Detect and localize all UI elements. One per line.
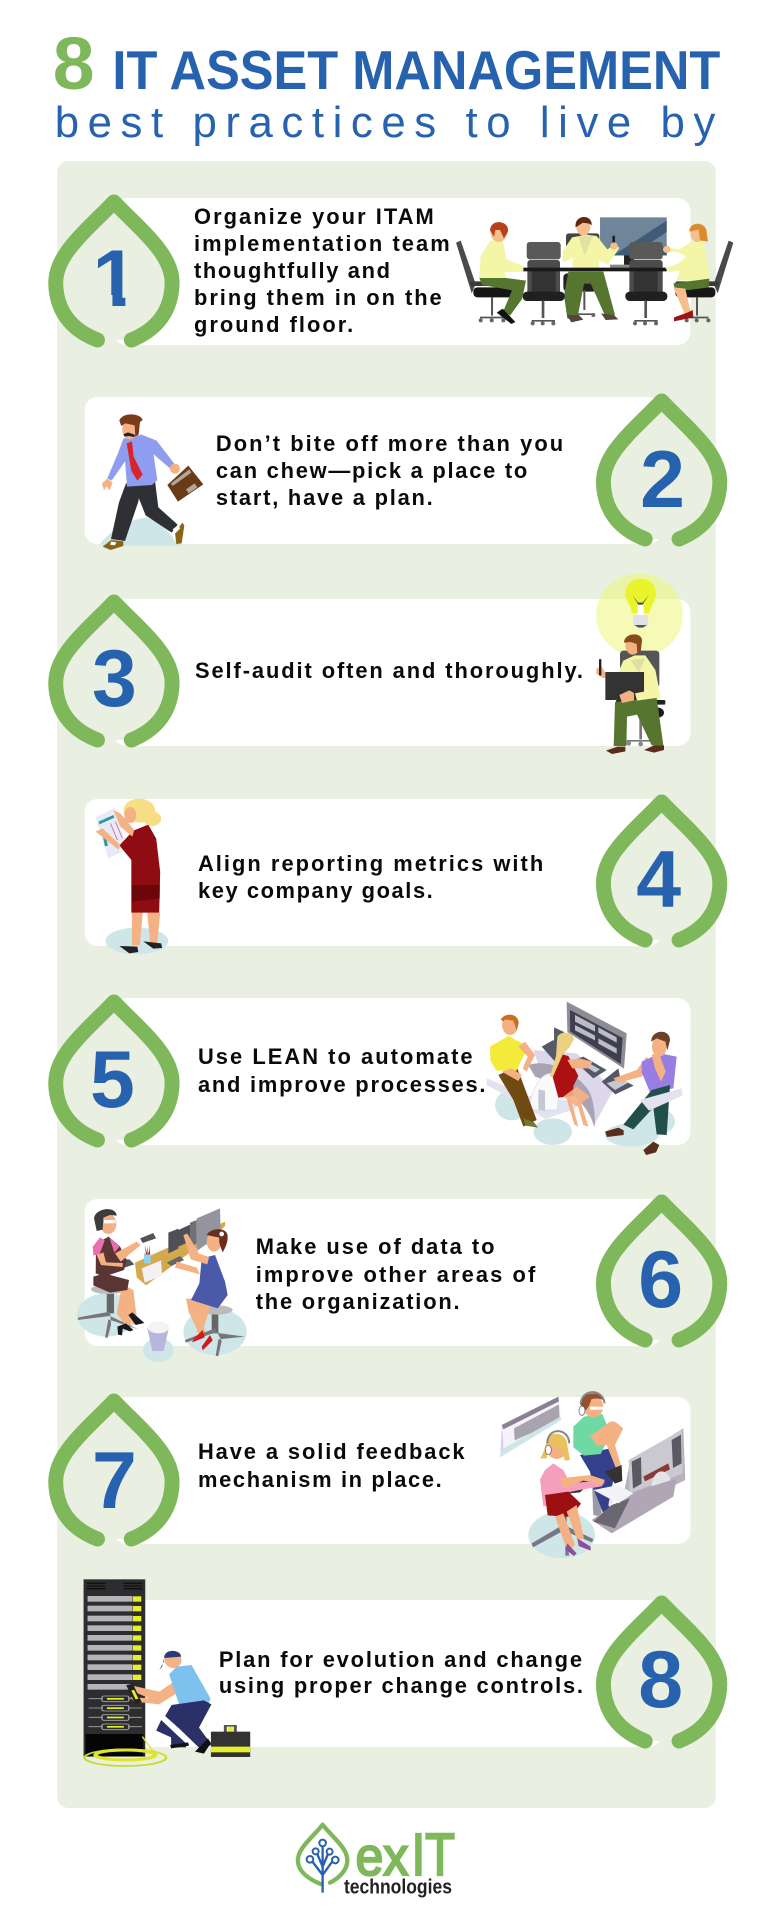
number 1: 1 (92, 234, 137, 324)
text 6: improve other areas of (256, 1262, 536, 1287)
text 8: Plan for evolution and change (219, 1647, 582, 1672)
number 3: 3 (92, 634, 137, 724)
illustration: man walking with briefcase (100, 414, 203, 550)
illustration: support agents with headsets (500, 1392, 685, 1558)
illustration: technician at server rack (84, 1579, 250, 1766)
number 8: 8 (638, 1635, 683, 1725)
card 3 (113, 599, 690, 746)
row 2 (85, 397, 720, 550)
text 4: key company goals. (198, 878, 433, 903)
leaf 3 (56, 602, 172, 740)
leaf 8 (603, 1603, 720, 1741)
text 7: mechanism in place. (198, 1467, 442, 1492)
card 5 (113, 998, 690, 1145)
text 6: Make use of data to (256, 1234, 494, 1259)
illustration: woman reading report (96, 799, 168, 954)
title (53, 22, 720, 147)
text 1 (194, 204, 450, 337)
leaf 6 (603, 1202, 720, 1340)
illustration: colleagues at workstation (487, 1002, 682, 1155)
text 1: ground floor. (194, 312, 353, 337)
text 5: and improve processes. (198, 1072, 486, 1097)
card 7 (113, 1397, 690, 1544)
text 6: the organization. (256, 1289, 460, 1314)
number 6: 6 (638, 1235, 683, 1325)
row 5 (56, 998, 690, 1155)
text 2: start, have a plan. (216, 485, 433, 510)
logo tagline: technologies (344, 1875, 452, 1898)
logo leaf (298, 1825, 347, 1884)
text 7 (198, 1439, 465, 1492)
card 4 (85, 799, 662, 946)
text 1: thoughtfully and (194, 258, 390, 283)
logo wordmark: IT (412, 1821, 455, 1888)
leaf 5 (56, 1002, 172, 1140)
panel: background (57, 161, 716, 1808)
card 1 (113, 198, 690, 345)
card 2 (85, 397, 662, 544)
text 5 (198, 1044, 486, 1097)
illustration: seated man with idea bulb (596, 573, 683, 754)
text 3: Self-audit often and thoroughly. (195, 658, 583, 683)
row 7 (56, 1392, 690, 1558)
logo circuit tree (307, 1840, 339, 1893)
text 2 (216, 431, 563, 510)
text 6 (256, 1234, 536, 1314)
title line 2: best practices to live by (55, 98, 715, 147)
text 1: implementation team (194, 231, 450, 256)
text 8: using proper change controls. (219, 1673, 583, 1698)
logo wordmark: ex (356, 1827, 408, 1887)
row 1 (56, 198, 733, 345)
row 6 (77, 1199, 720, 1362)
number 5: 5 (90, 1035, 135, 1125)
leaf 2 (603, 401, 720, 539)
text 2: can chew—pick a place to (216, 458, 527, 483)
illustration: women at a shelf (77, 1208, 247, 1362)
leaf 7 (56, 1401, 172, 1539)
title line 1: IT ASSET MANAGEMENT (112, 39, 720, 101)
leaf 4 (603, 802, 720, 940)
card 8 (85, 1600, 662, 1747)
text 1: bring them in on the (194, 285, 442, 310)
logo (298, 1821, 455, 1898)
leaf 1 (56, 202, 172, 340)
row 3 (56, 573, 690, 754)
text 2: Don’t bite off more than you (216, 431, 563, 456)
text 1: Organize your ITAM (194, 204, 434, 229)
text 4: Align reporting metrics with (198, 851, 543, 876)
text 7: Have a solid feedback (198, 1439, 465, 1464)
title number 8: 8 (53, 22, 95, 105)
number 7: 7 (92, 1436, 137, 1526)
text 5: Use LEAN to automate (198, 1044, 473, 1069)
row 4 (85, 799, 720, 954)
row 8 (84, 1579, 720, 1766)
card 6 (85, 1199, 662, 1346)
text 8 (219, 1647, 583, 1698)
number 2: 2 (640, 435, 685, 525)
illustration: team at a table (456, 217, 733, 325)
number 4: 4 (636, 835, 681, 925)
text 4 (198, 851, 543, 903)
